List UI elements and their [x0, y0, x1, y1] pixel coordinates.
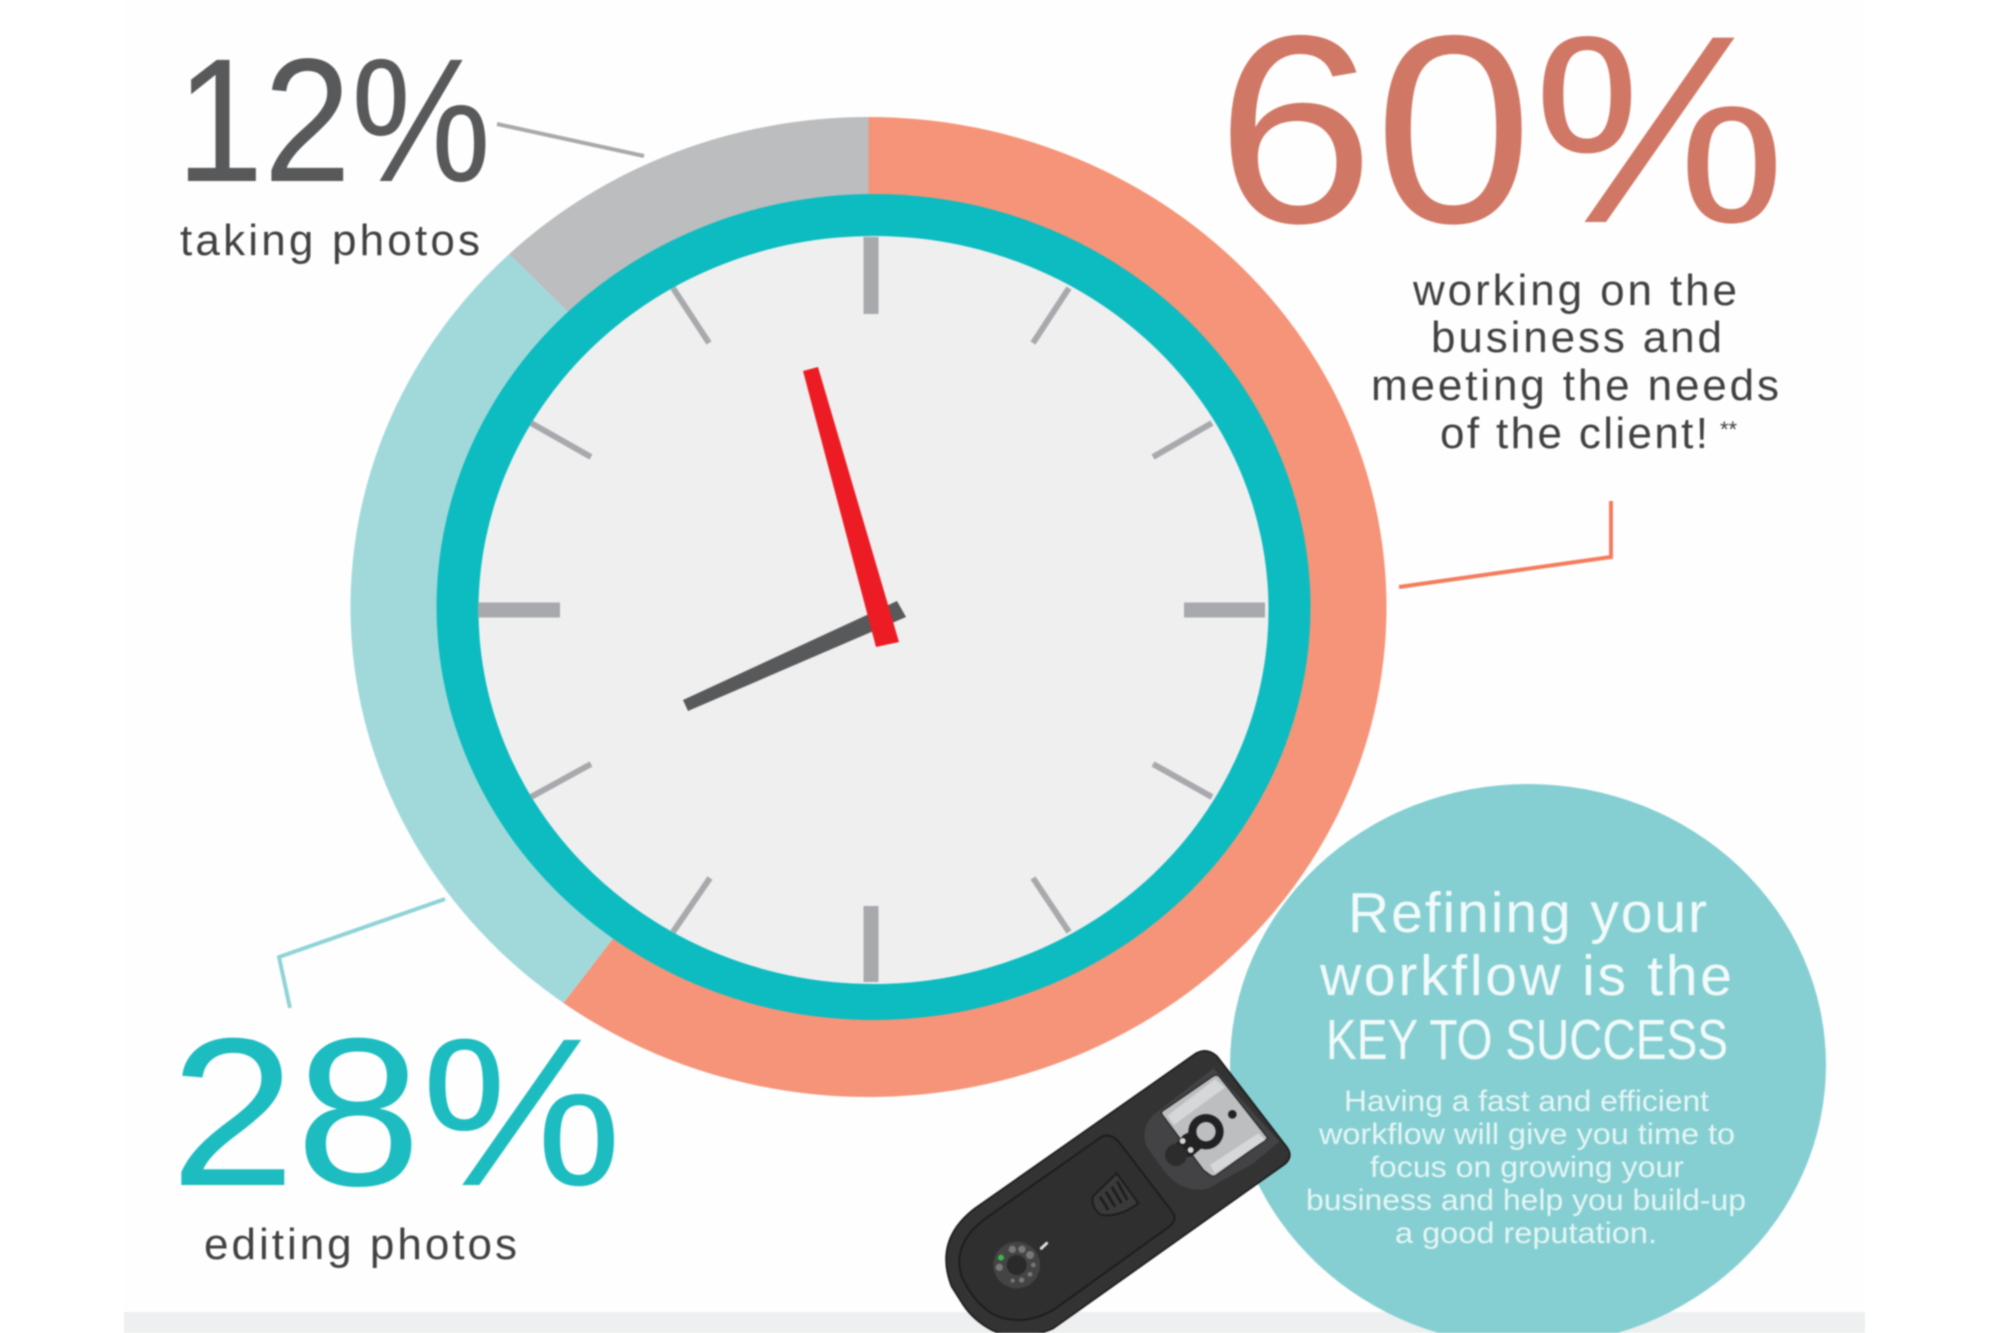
- label text block: business and: [1431, 313, 1722, 362]
- callout body text: focus on growing your: [1370, 1151, 1684, 1184]
- footer band: [124, 1312, 1865, 1333]
- icon: camera flash trigger: [946, 1051, 1290, 1333]
- leader line: 60%: [1399, 501, 1611, 587]
- leader line: 28%: [279, 899, 445, 1008]
- callout body text: Having a fast and efficient: [1344, 1085, 1710, 1118]
- ring segment: 60% orange: [563, 117, 1386, 1097]
- ring segment: 12% gray: [509, 117, 868, 607]
- metal hot shoe plate: [1161, 1075, 1268, 1176]
- clock ticks: [478, 237, 1265, 982]
- mode dial: [993, 1242, 1047, 1288]
- label editing photos: editing photos: [204, 1220, 517, 1269]
- hour hand: [683, 601, 906, 711]
- device body: [946, 1051, 1290, 1333]
- callout heading: [1319, 881, 1732, 1072]
- leader line: 12%: [497, 124, 644, 156]
- number 28%: 28%: [170, 994, 622, 1230]
- stat: 60% working on the business: [1216, 0, 1786, 458]
- hot shoe recess: [1144, 1068, 1279, 1190]
- clock face: [478, 236, 1268, 984]
- ring segment: 28% light teal: [350, 254, 868, 1003]
- callout body text: business and help you build-up: [1306, 1184, 1746, 1217]
- number 12%: 12%: [176, 23, 491, 219]
- grip shield: [1093, 1173, 1138, 1215]
- callout body text: [1306, 1085, 1746, 1250]
- minute hand: [803, 367, 899, 647]
- clock chart: [350, 117, 1386, 1097]
- callout heading: Refining your: [1348, 881, 1707, 945]
- stat: 12% taking photos: [176, 23, 491, 265]
- label text block: meeting the needs: [1371, 361, 1779, 410]
- label text block: [1371, 266, 1779, 458]
- label text block: working on the: [1412, 266, 1737, 315]
- callout heading: KEY TO SUCCESS: [1326, 1008, 1728, 1072]
- callout body text: a good reputation.: [1395, 1217, 1657, 1250]
- callout heading: workflow is the: [1319, 944, 1732, 1008]
- label taking photos: taking photos: [180, 216, 480, 265]
- clock rim: [436, 194, 1310, 1020]
- stat: 28% editing photos: [170, 994, 622, 1269]
- callout body text: workflow will give you time to: [1318, 1118, 1735, 1151]
- battery door: [959, 1136, 1175, 1320]
- label text block: **: [1720, 417, 1738, 442]
- callout background: [1230, 784, 1826, 1333]
- label text block: of the client!: [1440, 409, 1708, 458]
- callout circle: [1230, 784, 1826, 1333]
